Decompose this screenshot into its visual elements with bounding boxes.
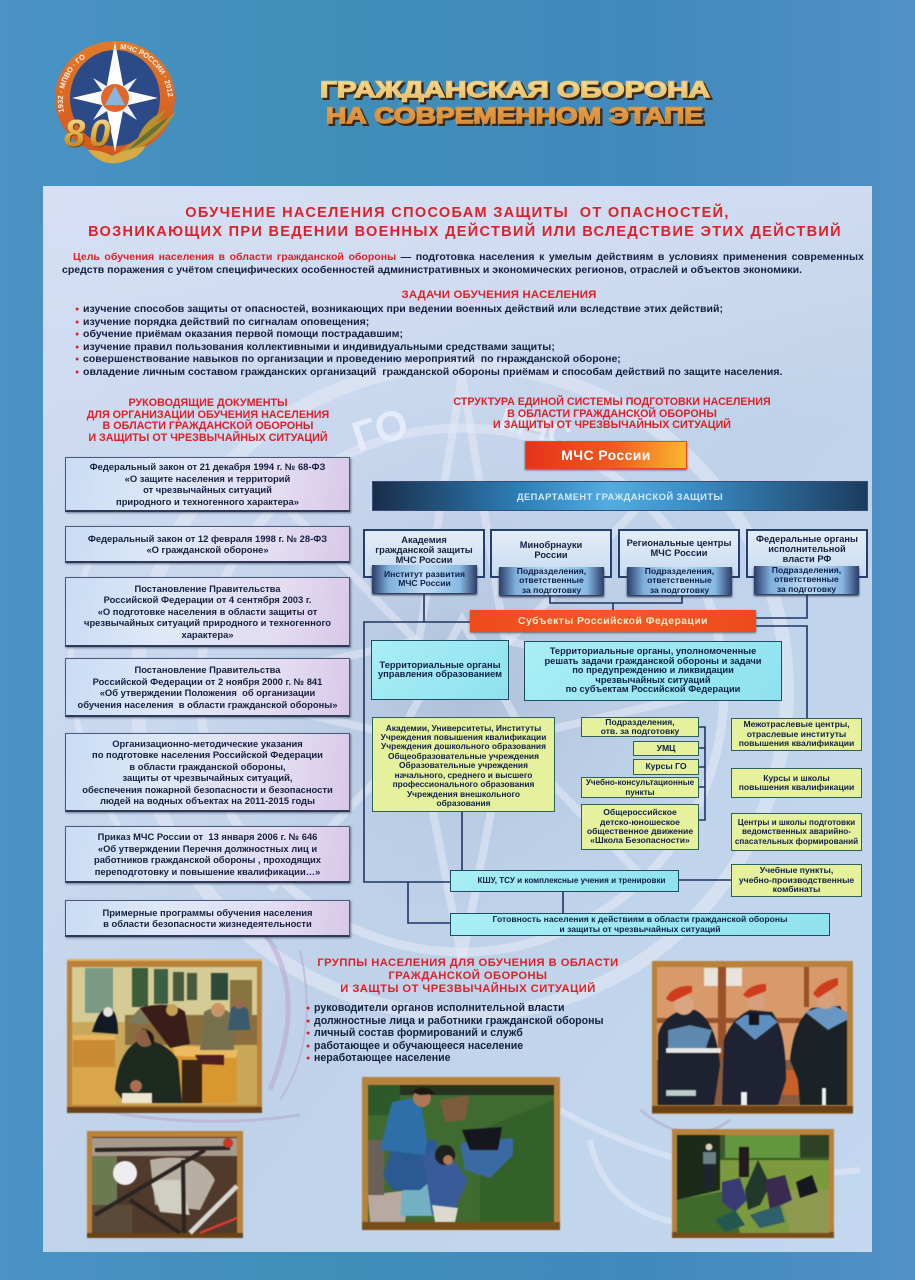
tasks heading: ЗАДАЧИ ОБУЧЕНИЯ НАСЕЛЕНИЯ [401, 289, 596, 301]
civil defence courses: Курсы ГО [645, 761, 687, 771]
middle cadet [722, 1010, 786, 1105]
sub box: institute: МЧС России [398, 578, 451, 588]
sub box: regional units: за подготовку [650, 585, 709, 595]
readiness bar: и защиты от чрезвычайных ситуаций [559, 924, 721, 934]
sub box: institute: Институт развития [384, 569, 465, 579]
tasks list: ● [75, 331, 79, 338]
intersectoral centres [731, 718, 862, 751]
document 5: защиты от чрезвычайных ситуаций, [122, 772, 293, 783]
school of safety movement [581, 804, 699, 850]
main heading [88, 204, 842, 240]
population groups list: ● [306, 1055, 310, 1062]
org box: academy: Академия [401, 535, 447, 545]
document 7: Примерные программы обучения населения [102, 906, 313, 918]
document 2: «О гражданской обороне» [146, 544, 269, 555]
structure chart [363, 440, 868, 936]
document 1: «О защите населения и территорий [125, 472, 290, 484]
territorial civil defence bodies: по предупреждению и ликвидации [572, 665, 734, 675]
educational institutions: Учреждения повышения квалификации [381, 732, 546, 742]
right column heading: В ОБЛАСТИ ГРАЖДАНСКОЙ ОБОРОНЫ [507, 408, 717, 420]
UMC [633, 741, 699, 756]
tasks list: совершенствование навыков по организации и проведению мероприятий по гнражданской обороне; [83, 353, 621, 365]
population groups list: должностные лица и работники гражданской обороны [314, 1015, 604, 1027]
logo: 80 years emblem: 80 [65, 114, 115, 156]
org box: ministry [490, 529, 612, 578]
document 2 [65, 526, 350, 563]
intro paragraph: средств поражения с учётом специфических особенностей административных и экономических регионов, отраслей и объектов экономики. [62, 264, 802, 276]
photo: first aid in the field [361, 1076, 561, 1231]
right column heading: И ЗАЩИТЫ ОТ ЧРЕЗВЫЧАЙНЫХ СИТУАЦИЙ [493, 419, 731, 431]
population groups list [306, 1002, 604, 1064]
population groups list: ● [306, 1030, 310, 1037]
courses and schools: Курсы и школы [763, 773, 830, 783]
consulting points: Учебно-консультационные [586, 778, 694, 787]
document 4: обучения населения в области гражданской обороны» [78, 698, 338, 710]
main heading: ОБУЧЕНИЕ НАСЕЛЕНИЯ СПОСОБАМ ЗАЩИТЫ ОТ ОПАСНОСТЕЙ, [185, 205, 730, 221]
civil defence courses [633, 759, 699, 775]
population groups list: руководители органов исполнительной власти [314, 1002, 565, 1014]
sub box: regional units [627, 567, 732, 595]
document 5: Организационно-методические указания [112, 738, 303, 748]
tasks list: изучение правил пользования коллективными и индивидуальными средствами защиты; [83, 341, 555, 353]
background and light panel with emblem watermark: ГО [346, 399, 414, 461]
org box: ministry: России [534, 550, 568, 560]
consulting points: пункты [625, 788, 655, 796]
document 5: обеспечения пожарной безопасности и безопасности [82, 784, 333, 794]
document 3: Российской Федерации от 4 сентября 2003 г. [104, 594, 311, 605]
federation subjects bar [470, 610, 756, 632]
document 1 [65, 457, 350, 512]
right column heading: СТРУКТУРА ЕДИНОЙ СИСТЕМЫ ПОДГОТОВКИ НАСЕЛЕНИЯ [453, 396, 771, 408]
document 5: по подготовке населения Российской Федерации [92, 749, 323, 760]
document 7: в области безопасности жизнедеятельности [103, 918, 312, 929]
population groups heading: ГРАЖДАНСКОЙ ОБОРОНЫ [389, 970, 547, 982]
left cadet [658, 1010, 720, 1105]
educational institutions: Учреждения дошкольного образования [381, 741, 546, 751]
educational institutions: Учреждения внешкольного [407, 789, 520, 799]
title: НА СОВРЕМЕННОМ ЭТАПЕ [328, 105, 705, 130]
training units: Подразделения, [605, 717, 675, 727]
title: ГРАЖДАНСКАЯ ОБОРОНА [320, 77, 710, 102]
territorial education bodies [371, 640, 509, 700]
document 5 [65, 733, 350, 812]
training points: учебно-производственные [739, 875, 854, 885]
courses and schools [731, 768, 862, 798]
sub box: institute [372, 565, 477, 593]
intro paragraph: Цель обучения населения в области гражданской обороны — подготовка населения к умелым действиям в условиях применения современных [73, 251, 864, 263]
territorial education bodies: Территориальные органы [379, 660, 501, 670]
school of safety movement: детско-юношеское [600, 817, 680, 827]
intersectoral centres: Межотраслевые центры, [743, 719, 850, 729]
population groups heading: И ЗАЩТЫ ОТ ЧРЕЗВЫЧАЙНЫХ СИТУАЦИЙ [340, 983, 596, 995]
training points: комбинаты [773, 884, 820, 894]
UMC: УМЦ [657, 743, 675, 753]
tasks list: ● [75, 369, 79, 376]
territorial civil defence bodies [524, 641, 782, 701]
population groups list: личный состав формирований и служб [314, 1027, 523, 1039]
sub box: ministry units: Подразделения, [517, 566, 586, 576]
territorial civil defence bodies: решать задачи гражданской обороны и задачи [544, 656, 762, 666]
sub box: federal units [754, 566, 859, 594]
readiness bar: Готовность населения к действиям в области гражданской обороны [493, 914, 787, 924]
document 2: Федеральный закон от 12 февраля 1998 г. № 28-ФЗ [88, 532, 327, 544]
document 5: людей на водных объектах на 2011-2015 годы [100, 795, 315, 806]
documents column [64, 456, 352, 940]
photo: cadets in red berets [651, 960, 854, 1115]
departmental training centres [731, 813, 862, 851]
document 3 [65, 577, 350, 647]
org box: federal bodies: власти РФ [783, 554, 831, 564]
logo: 80 years emblem: 80 [64, 113, 114, 155]
org box: federal bodies: исполнительной [768, 544, 846, 554]
departmental training centres: Центры и школы подготовки [738, 818, 855, 827]
document 1: природного и техногенного характера» [116, 496, 299, 506]
intersectoral centres: отраслевые институты [747, 729, 846, 739]
sub box: federal units: Подразделения, [772, 565, 841, 575]
department bar: ДЕПАРТАМЕНТ ГРАЖДАНСКОЙ ЗАЩИТЫ [517, 490, 723, 502]
document 3: чрезвычайных ситуаций природного и техногенного [84, 617, 331, 628]
school of safety movement: «Школа Безопасности» [590, 835, 690, 845]
school of safety movement: общественное движение [587, 826, 693, 836]
consulting points [581, 777, 699, 798]
document 3: характера» [181, 629, 234, 640]
exercises bar: КШУ, ТСУ и комплексные учения и тренировки [478, 876, 666, 885]
sub box: federal units: за подготовку [777, 584, 836, 594]
left column heading: И ЗАЩИТЫ ОТ ЧРЕЗВЫЧАЙНЫХ СИТУАЦИЙ [88, 432, 328, 444]
tasks list: ● [75, 306, 79, 313]
population groups list: неработающее население [314, 1052, 451, 1064]
document 4: «Об утверждении Положения об организации [100, 687, 315, 698]
document 7 [65, 900, 350, 937]
training units [581, 717, 699, 737]
sub box: regional units: ответственные [647, 575, 712, 585]
logo: 80 years emblem: МЧС РОССИИ · 2012 [120, 44, 173, 97]
document 4: Постановление Правительства [134, 664, 281, 675]
training points: Учебные пункты, [760, 865, 833, 875]
educational institutions: профессионального образования [393, 779, 534, 789]
document 1: Федеральный закон от 21 декабря 1994 г. № 68-ФЗ [90, 461, 325, 472]
right cadet [790, 1006, 847, 1105]
title: НА СОВРЕМЕННОМ ЭТАПЕ [326, 103, 703, 128]
document 6 [65, 826, 350, 883]
tasks list: обучение приёмам оказания первой помощи пострадавшим; [83, 328, 403, 340]
courses and schools: повышения квалификации [739, 782, 854, 792]
intersectoral centres: повышения квалификации [739, 738, 854, 748]
departmental training centres: ведомственных аварийно- [742, 827, 851, 836]
school of safety movement: Общероссийское [603, 807, 677, 817]
educational institutions [372, 717, 555, 812]
org box: academy: гражданской защиты [375, 545, 473, 555]
main heading: ВОЗНИКАЮЩИХ ПРИ ВЕДЕНИИ ВОЕННЫХ ДЕЙСТВИЙ ИЛИ ВСЛЕДСТВИЕ ЭТИХ ДЕЙСТВИЙ [88, 224, 842, 240]
MChS box: МЧС России [561, 447, 651, 463]
territorial civil defence bodies: по субъектам Российской Федерации [566, 684, 740, 694]
document 4: Российской Федерации от 2 ноября 2000 г. № 841 [93, 676, 322, 686]
population groups list: ● [306, 1005, 310, 1012]
org box: federal bodies: Федеральные органы [756, 534, 858, 544]
sub box: ministry units [499, 567, 604, 595]
population groups list: работающее и обучающееся население [314, 1040, 523, 1052]
org box: academy [363, 529, 485, 578]
intro paragraph [62, 251, 864, 276]
readiness bar [450, 913, 830, 936]
document 3: Постановление Правительства [134, 583, 281, 594]
left column heading [86, 397, 329, 444]
document 6: работников гражданской обороны , проходящих [94, 854, 321, 865]
tasks list: ● [75, 344, 79, 351]
tasks list [75, 303, 782, 378]
educational institutions: начального, среднего и высшего [395, 770, 532, 780]
population groups heading: ГРУППЫ НАСЕЛЕНИЯ ДЛЯ ОБУЧЕНИЯ В ОБЛАСТИ [317, 957, 619, 969]
org box: academy: МЧС России [396, 555, 452, 565]
educational institutions: Общеобразовательные учреждения [388, 751, 539, 761]
document 1: от чрезвычайных ситуаций [143, 484, 272, 495]
sub box: ministry units: ответственные [519, 575, 584, 585]
tasks list: овладение личным составом гражданских организаций гражданской обороны приёмам и способам действий по защите населения. [83, 366, 782, 378]
department bar [372, 481, 868, 511]
territorial civil defence bodies: чрезвычайных ситуаций [595, 675, 711, 685]
left column heading: ДЛЯ ОРГАНИЗАЦИИ ОБУЧЕНИЯ НАСЕЛЕНИЯ [87, 408, 329, 420]
educational institutions: Академии, Университеты, Институты [386, 723, 541, 733]
sub box: federal units: ответственные [774, 574, 839, 584]
training units: отв. за подготовку [601, 726, 679, 736]
exercises bar [450, 870, 679, 892]
org box: regional centres: Региональные центры [627, 538, 731, 548]
photo: forest training [671, 1128, 835, 1239]
educational institutions: образования [436, 798, 490, 808]
departmental training centres: спасательных формирований [735, 837, 858, 846]
left column heading: В ОБЛАСТИ ГРАЖДАНСКОЙ ОБОРОНЫ [103, 420, 313, 432]
MChS box [525, 441, 687, 469]
org box: regional centres [618, 529, 740, 578]
document 5: в области гражданской обороны, [129, 760, 286, 772]
document 4 [65, 658, 350, 717]
population groups list: ● [306, 1043, 310, 1050]
educational institutions: Образовательные учреждения [399, 760, 528, 770]
org box: federal bodies [746, 529, 868, 578]
territorial education bodies: управления образованием [378, 669, 502, 679]
federation subjects bar: Субъекты Российской Федерации [518, 616, 708, 626]
background and light panel with emblem watermark: МЧС [496, 400, 575, 455]
title: ГРАЖДАНСКАЯ ОБОРОНА [322, 79, 712, 104]
photo: classroom [66, 958, 263, 1114]
logo: 80 years emblem: 1932 · МПВО · ГО [58, 54, 84, 112]
org box: ministry: Минобрнауки [520, 540, 582, 550]
photo: rescue under wreckage [86, 1130, 244, 1239]
document 6: переподготовку и повышение квалификации…» [95, 866, 320, 876]
document 6: Приказ МЧС России от 13 января 2006 г. № 646 [98, 831, 317, 842]
training points [731, 864, 862, 897]
right column heading [453, 395, 771, 431]
tasks list: изучение способов защиты от опасностей, возникающих при ведении военных действий или вследствие этих действий; [83, 303, 723, 315]
population groups heading [317, 957, 619, 995]
tasks list: ● [75, 319, 79, 326]
document 6: «Об утверждении Перечня должностных лиц и [98, 842, 317, 854]
tasks list: изучение порядка действий по сигналам оповещения; [83, 316, 369, 328]
org box: regional centres: МЧС России [651, 548, 707, 558]
tasks list: ● [75, 356, 79, 363]
sub box: ministry units: за подготовку [522, 585, 581, 595]
document 3: «О подготовке населения в области защиты от [98, 606, 317, 617]
population groups list: ● [306, 1018, 310, 1025]
territorial civil defence bodies: Территориальные органы, уполномоченные [550, 646, 756, 656]
sub box: regional units: Подразделения, [645, 566, 714, 576]
left column heading: РУКОВОДЯЩИЕ ДОКУМЕНТЫ [128, 397, 288, 409]
